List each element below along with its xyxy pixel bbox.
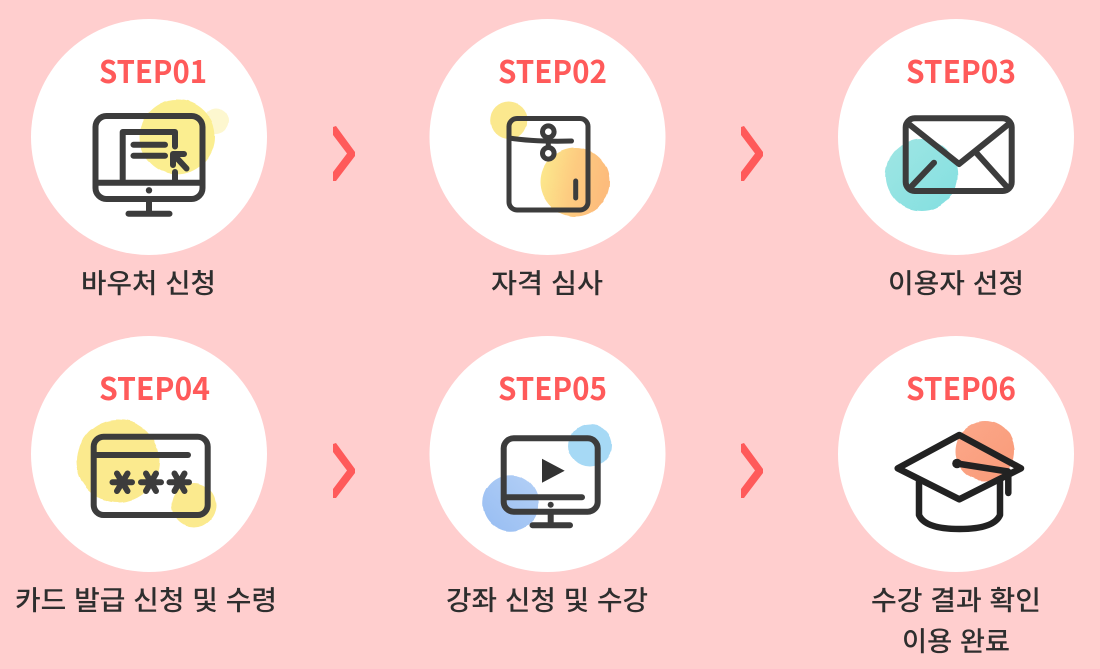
step 02 label: 자격 심사 xyxy=(491,262,603,301)
step 02: eligibility review xyxy=(430,19,666,255)
step 02 heading: STEP02 xyxy=(498,47,607,92)
step 01 label: 바우처 신청 xyxy=(81,262,216,301)
step 06 label: 이용 완료 xyxy=(902,620,1010,659)
arrow 2 xyxy=(741,126,763,181)
step 03 heading: STEP03 xyxy=(906,47,1016,92)
step 04 heading: STEP04 xyxy=(99,364,210,409)
step 06 label xyxy=(871,579,1041,659)
step 05 label: 강좌 신청 및 수강 xyxy=(446,579,648,618)
step 03: user selection xyxy=(838,19,1074,255)
icon: monitor with cursor xyxy=(96,100,229,214)
icon: card with password xyxy=(76,420,216,527)
step 01 heading: STEP01 xyxy=(99,47,207,92)
step 03 label: 이용자 선정 xyxy=(888,262,1024,301)
step 01: voucher application xyxy=(31,19,267,255)
arrow 1 xyxy=(333,126,355,181)
step 04: card issue xyxy=(31,336,267,572)
icon: string-tie envelope xyxy=(490,102,610,216)
icon: graduation cap xyxy=(898,421,1021,529)
arrow 3 xyxy=(333,443,355,498)
icon: mail envelope xyxy=(886,118,1012,211)
icon: play triangle xyxy=(542,459,565,483)
step 06 heading: STEP06 xyxy=(906,364,1016,409)
step 05: course enrolment xyxy=(430,336,666,572)
step 04 label: 카드 발급 신청 및 수령 xyxy=(15,579,277,618)
icon: video monitor xyxy=(483,424,612,531)
step 06 label: 수강 결과 확인 xyxy=(871,579,1041,618)
step 05 heading: STEP05 xyxy=(498,364,607,409)
step 06: completion xyxy=(838,336,1074,572)
arrow 4 xyxy=(741,443,763,498)
